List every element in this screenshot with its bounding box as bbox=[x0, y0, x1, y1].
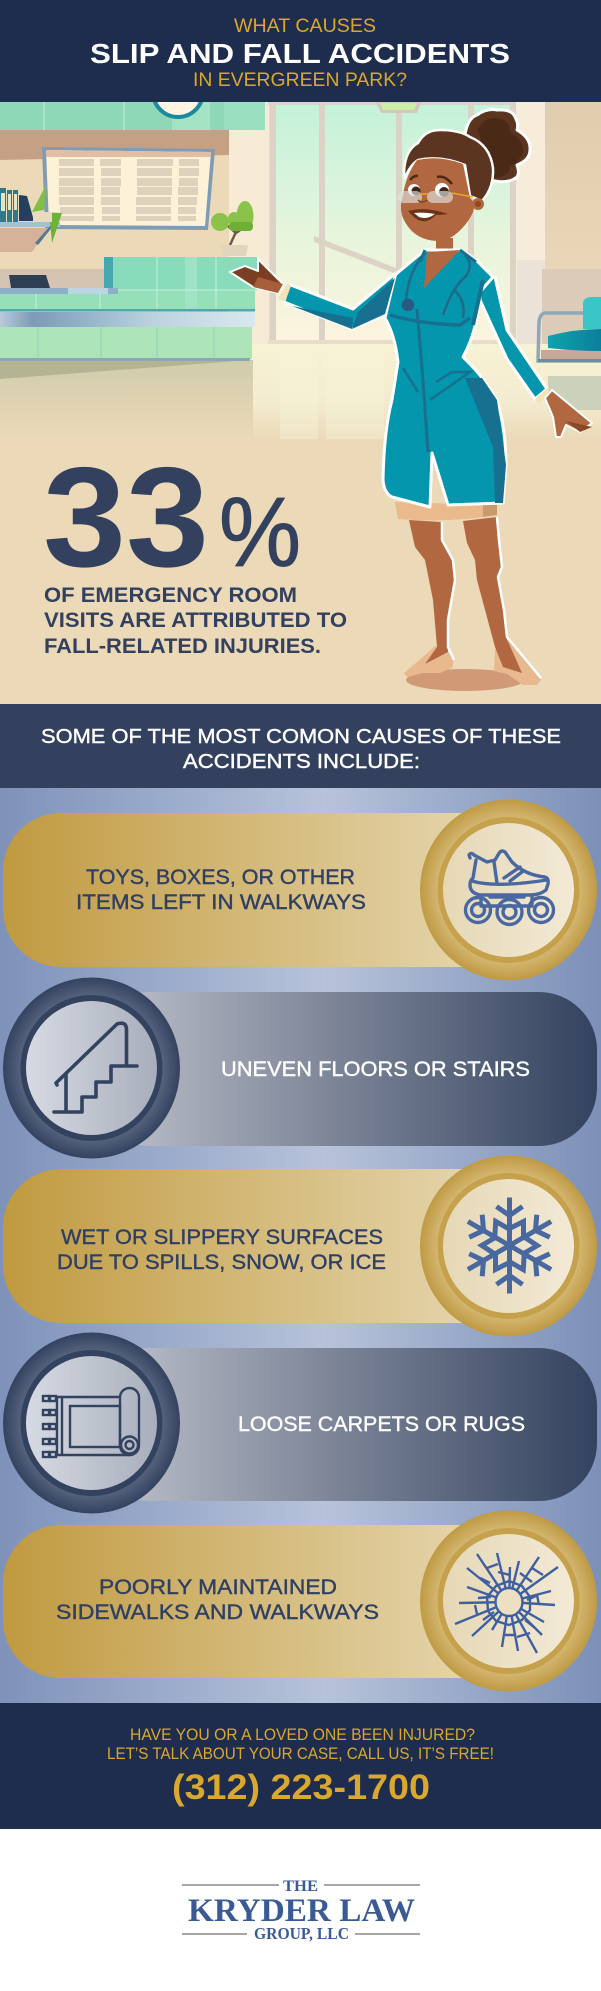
heading: in evergreen park: IN EVERGREEN PARK? bbox=[193, 70, 407, 91]
call to action text: LET’S TALK ABOUT YOUR CASE, CALL US, IT’S FREE! bbox=[107, 1744, 494, 1763]
schedule board bbox=[42, 147, 215, 230]
doctor: skirt bbox=[395, 502, 497, 520]
bonsai plant bbox=[211, 201, 254, 256]
cause 5 badge bbox=[420, 1510, 597, 1692]
cause 5: poorly maintained sidewalks bbox=[3, 1510, 597, 1692]
footer call to action band bbox=[0, 1703, 601, 1829]
statistic: 33 percent: % bbox=[219, 477, 301, 587]
reception desk bbox=[0, 257, 257, 361]
statistic: 33 percent bbox=[43, 438, 301, 597]
cause 3 badge bbox=[420, 1156, 597, 1336]
shelf with binders and plant bbox=[0, 185, 62, 252]
doctor: hair bun bbox=[465, 110, 530, 182]
doctor: feet bbox=[404, 640, 541, 685]
icon: stairs bbox=[54, 1023, 137, 1112]
doctor: stethoscope bbox=[403, 255, 470, 318]
cause 5 text: POORLY MAINTAINED bbox=[99, 1576, 337, 1599]
logo: The Kryder Law Group bbox=[182, 1878, 420, 1943]
doctor: coat body bbox=[383, 250, 506, 507]
cause 1 text: ITEMS LEFT IN WALKWAYS bbox=[76, 891, 366, 914]
cause 4 badge bbox=[3, 1332, 180, 1514]
cause 3 text: WET OR SLIPPERY SURFACES bbox=[61, 1226, 383, 1249]
cause 3 text: DUE TO SPILLS, SNOW, OR ICE bbox=[57, 1251, 386, 1274]
panel: causes background bbox=[0, 788, 601, 1703]
cause 1: toys and boxes bbox=[3, 800, 597, 980]
icon: cracked surface bbox=[455, 1553, 558, 1653]
wall sign: top green band and clock bbox=[0, 102, 265, 130]
call to action text bbox=[107, 1725, 494, 1763]
icon: roller skate bbox=[466, 851, 554, 924]
doctor: legs bbox=[409, 517, 541, 678]
phone number: (312) 223-1700 bbox=[172, 1768, 430, 1807]
icon: snowflake bbox=[461, 1198, 558, 1294]
cause 1 text: TOYS, BOXES, OR OTHER bbox=[86, 866, 355, 889]
call to action text: HAVE YOU OR A LOVED ONE BEEN INJURED? bbox=[130, 1725, 475, 1744]
doctor: right arm bbox=[480, 277, 592, 437]
section heading band: ACCIDENTS INCLUDE: bbox=[183, 751, 420, 773]
doctor: hair front bbox=[404, 130, 493, 201]
statistic description: OF EMERGENCY ROOM bbox=[44, 584, 297, 607]
icon: carpet roll bbox=[43, 1388, 139, 1457]
statistic description: FALL-RELATED INJURIES. bbox=[44, 635, 321, 658]
cause 4: loose carpets or rugs bbox=[3, 1332, 597, 1514]
illustration panel: hospital reception bbox=[0, 67, 601, 704]
cause 1 badge bbox=[420, 800, 597, 980]
logo: The Kryder Law Group: GROUP, LLC bbox=[254, 1924, 349, 1943]
statistic: 33 percent: 33 bbox=[43, 438, 209, 597]
doctor: left arm and hand bbox=[230, 259, 396, 329]
cause 4 text: LOOSE CARPETS OR RUGS bbox=[238, 1413, 525, 1436]
header band bbox=[0, 0, 601, 102]
floor shadow bbox=[406, 669, 524, 691]
heading: slip and fall accidents: SLIP AND FALL ACCIDENTS bbox=[90, 38, 510, 69]
cause 3 text bbox=[57, 1226, 386, 1274]
cause 5 text: SIDEWALKS AND WALKWAYS bbox=[56, 1601, 379, 1624]
doctor character bbox=[230, 110, 592, 685]
statistic description bbox=[44, 584, 347, 658]
cause 2: uneven floors or stairs bbox=[3, 978, 597, 1158]
section heading band: SOME OF THE MOST COMON CAUSES OF THESE bbox=[41, 726, 561, 748]
armchair bbox=[538, 297, 601, 362]
logo: The Kryder Law Group: THE bbox=[283, 1878, 318, 1895]
cause 3: wet or slippery surfaces bbox=[3, 1156, 597, 1336]
statistic description: VISITS ARE ATTRIBUTED TO bbox=[44, 609, 347, 632]
logo: The Kryder Law Group: KRYDER LAW bbox=[188, 1893, 415, 1929]
cause 2 text: UNEVEN FLOORS OR STAIRS bbox=[221, 1058, 530, 1081]
cause 2 badge bbox=[3, 978, 180, 1158]
cause 1 text bbox=[76, 866, 366, 914]
cause 5 text bbox=[56, 1576, 379, 1624]
heading: what causes: WHAT CAUSES bbox=[234, 16, 376, 37]
doctor: neck bbox=[436, 238, 453, 248]
section heading band bbox=[0, 704, 601, 788]
doctor: face bbox=[398, 158, 484, 241]
